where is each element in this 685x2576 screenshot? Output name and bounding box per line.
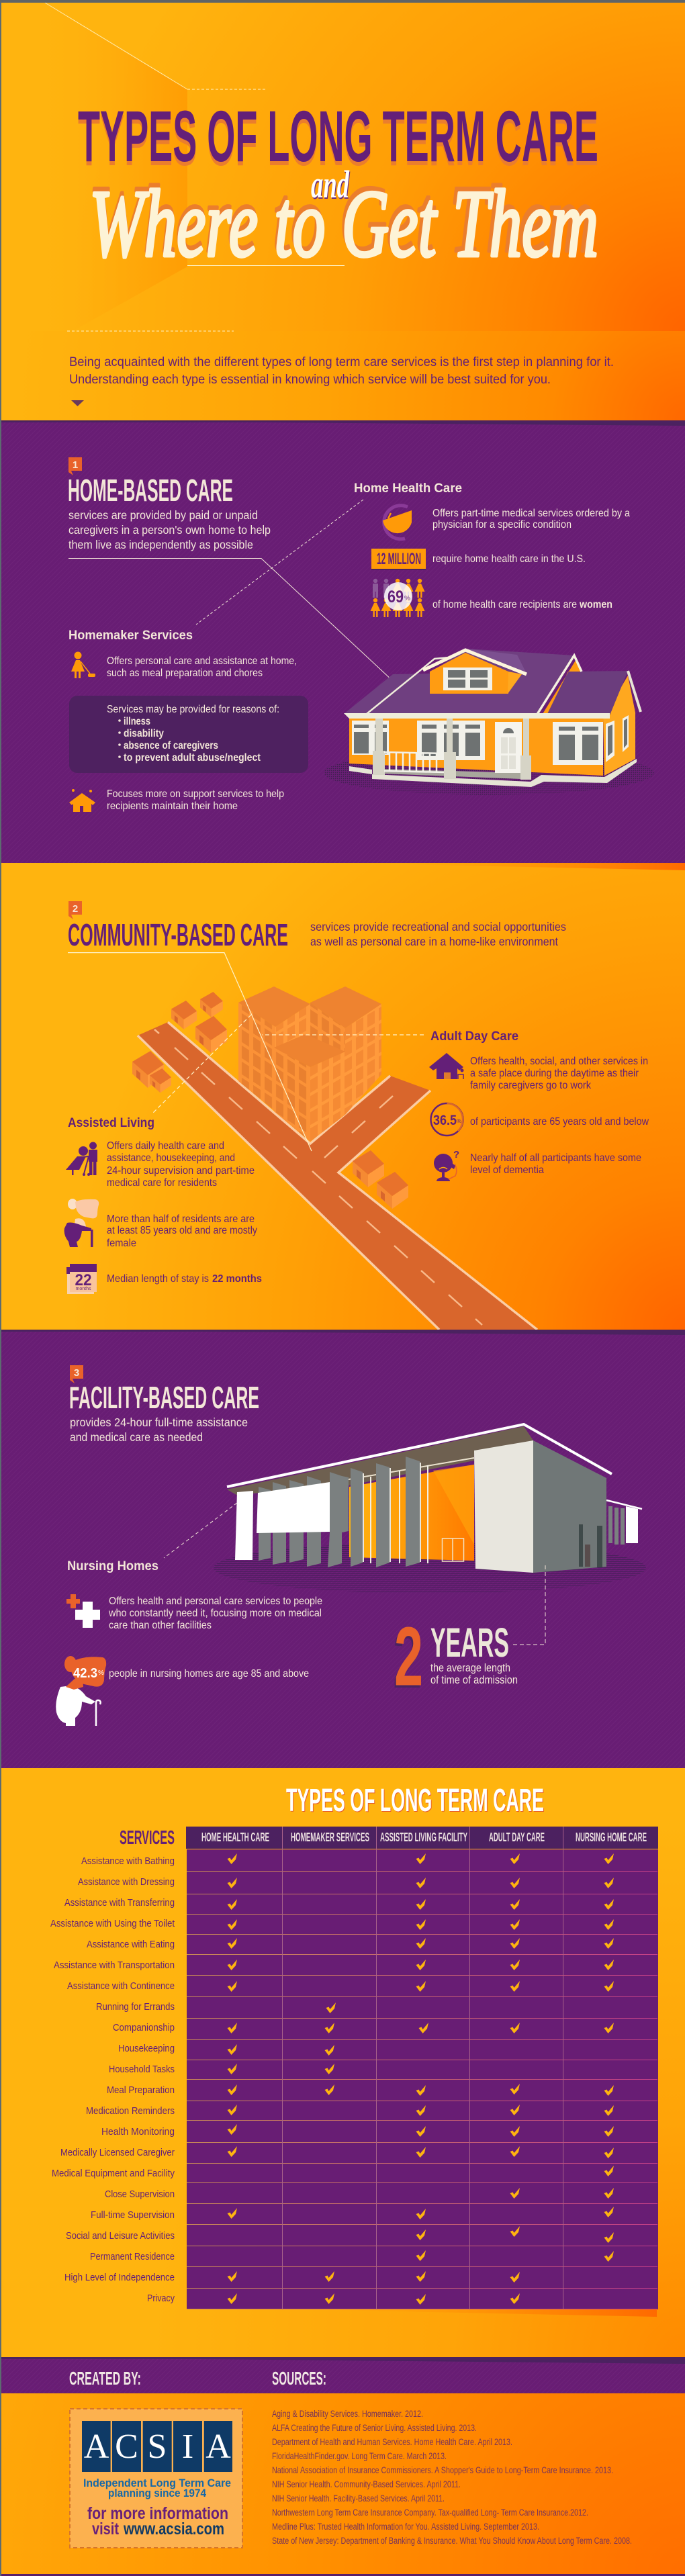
logo box: acsia: visit xyxy=(92,2520,120,2538)
services heading: SERVICES xyxy=(120,1827,175,1849)
stat: 2 years xyxy=(393,1610,518,1706)
text: assisted living: assistance, housekeeping, and xyxy=(107,1152,235,1164)
badge 1: 1 xyxy=(73,459,78,471)
sources list: Medline Plus: Trusted Health Information for You. Assisted Living. September 2013. xyxy=(272,2522,539,2532)
callout: reasons: absence of caregivers xyxy=(124,740,218,751)
text: support services: recipients maintain their home xyxy=(107,800,238,812)
heading: sources: SOURCES: xyxy=(272,2368,326,2389)
road illustration xyxy=(138,1022,537,1330)
service labels: Social and Leisure Activities xyxy=(66,2230,175,2242)
icon: elder woman xyxy=(64,1199,99,1247)
service labels: Medical Equipment and Facility xyxy=(52,2168,175,2179)
text: residents xyxy=(107,1213,257,1249)
text: participants: of participants are 65 years old and below xyxy=(470,1116,649,1128)
service labels: Assistance with Dressing xyxy=(78,1876,175,1888)
service labels: Assistance with Transportation xyxy=(54,1960,175,1971)
icon: calendar 22 months: months xyxy=(76,1287,91,1291)
stat: 2 years: the average length xyxy=(430,1662,510,1674)
subtitle: and: and xyxy=(312,164,351,208)
panel: home-based care xyxy=(1,420,685,864)
heading: facility-based care: FACILITY-BASED CARE xyxy=(69,1380,259,1415)
stat: 2 years: 2 xyxy=(394,1610,423,1703)
service labels: Assistance with Transferring xyxy=(64,1897,175,1908)
stat: 12 million: 12 MILLION xyxy=(377,550,421,568)
sources list: Aging & Disability Services. Homemaker. 2012. xyxy=(272,2409,423,2419)
description: as well as personal care in a home-like environment xyxy=(310,935,558,948)
badge 3: 3 xyxy=(74,1367,79,1379)
icon: medical crosses xyxy=(66,1594,100,1628)
panel: header xyxy=(1,3,685,420)
heading: adult day care: Adult Day Care xyxy=(430,1029,518,1044)
text: adult day care xyxy=(470,1056,648,1091)
stat: 2 years: 2 xyxy=(393,1613,422,1706)
text: personal care: Offers personal care and assistance at home, xyxy=(107,655,297,667)
house illustration xyxy=(324,649,654,795)
intro text xyxy=(69,355,614,387)
heading: home-based care: HOME-BASED CARE xyxy=(68,473,233,508)
icon: elder with percent xyxy=(56,1656,106,1726)
callout: reasons: to prevent adult abuse/neglect xyxy=(124,752,261,764)
callout: reasons: disability xyxy=(124,728,164,739)
heading: nursing homes: Nursing Homes xyxy=(67,1559,158,1573)
table header: HOME HEALTH CARE xyxy=(201,1831,269,1844)
stat: 36.5 percent: % xyxy=(457,1118,461,1124)
service labels: Companionship xyxy=(113,2022,175,2033)
text: median stay: Median length of stay is xyxy=(107,1273,209,1285)
callout: reasons xyxy=(69,696,308,773)
logo box: acsia: S xyxy=(148,2428,167,2466)
service labels: High Level of Independence xyxy=(64,2272,175,2283)
text: nursing homes: Offers health and personal care services to people xyxy=(109,1596,322,1607)
service labels: Medication Reminders xyxy=(86,2105,175,2117)
text: dementia: Nearly half of all participants have some xyxy=(470,1152,641,1164)
badge 2 xyxy=(68,901,82,919)
panel: footer band xyxy=(1,2357,685,2393)
sources list: NIH Senior Health. Community-Based Services. April 2011. xyxy=(272,2479,461,2489)
heading: homemaker services: Homemaker Services xyxy=(68,629,193,643)
service labels: Housekeeping xyxy=(118,2043,175,2054)
service labels: Household Tasks xyxy=(109,2064,175,2075)
description xyxy=(68,508,271,551)
stat: 36.5 percent: 36.5 xyxy=(433,1113,457,1128)
text: part-time medical services: physician for a specific condition xyxy=(432,519,572,531)
service labels: Close Supervision xyxy=(105,2189,175,2200)
icon: house with stars xyxy=(69,789,95,812)
service labels: Running for Errands xyxy=(96,2001,175,2013)
text: nursing homes: care than other facilities xyxy=(109,1620,212,1631)
description: provides 24-hour full-time assistance xyxy=(70,1416,248,1429)
building illustration xyxy=(238,986,381,1142)
text: women: women xyxy=(579,599,612,610)
small houses xyxy=(132,992,408,1209)
logo box: acsia: I xyxy=(182,2428,193,2466)
icon: elder with percent: 42.3 xyxy=(73,1666,97,1681)
logo box: acsia: C xyxy=(115,2428,138,2466)
text: adult day care: family caregivers go to work xyxy=(470,1080,592,1091)
service labels: Assistance with Eating xyxy=(87,1939,175,1950)
callout: reasons: Services may be provided for reasons of: xyxy=(107,704,279,715)
text: support services xyxy=(107,788,284,812)
icon: clock xyxy=(383,506,412,539)
sources list: FloridaHealthFinder.gov. Long Term Care. March 2013. xyxy=(272,2451,447,2461)
text: dementia xyxy=(470,1152,641,1176)
text: dementia: level of dementia xyxy=(470,1164,544,1176)
panel: facility-based care xyxy=(1,1330,685,1768)
callout: reasons: illness xyxy=(124,716,150,727)
badge 1 xyxy=(68,457,82,475)
heading: community-based care: COMMUNITY-BASED CARE xyxy=(68,917,288,952)
description: services provide recreational and social opportunities xyxy=(310,920,566,933)
logo box: acsia: A xyxy=(205,2428,231,2466)
icon: calendar 22 months xyxy=(66,1264,97,1294)
service labels xyxy=(50,1855,175,2304)
logo box: acsia: planning since 1974 xyxy=(108,2487,206,2499)
text: nursing homes xyxy=(108,1596,322,1631)
description: services are provided by paid or unpaid xyxy=(68,508,258,522)
text: assisted living xyxy=(107,1140,255,1189)
logo box: acsia: for more information xyxy=(87,2504,228,2523)
service labels: Assistance with Continence xyxy=(67,1980,175,1992)
text: assisted living: Offers daily health care and xyxy=(107,1140,224,1152)
service labels: Privacy xyxy=(147,2293,175,2304)
icon: woman with vacuum xyxy=(71,651,95,678)
icon: people 69 percent: % xyxy=(404,595,410,602)
icon: people 69 percent xyxy=(371,579,424,617)
stat: 2 years: YEARS xyxy=(430,1620,509,1665)
stat: 12 million xyxy=(371,549,426,570)
logo box: acsia: www.acsia.com xyxy=(123,2520,224,2538)
table header: ASSISTED LIVING FACILITY xyxy=(380,1831,467,1844)
service labels: Assistance with Using the Toilet xyxy=(50,1918,175,1929)
subtitle: and: and xyxy=(311,163,350,206)
description: caregivers in a person's own home to help xyxy=(68,523,271,537)
sources list: ALFA Creating the Future of Senior Living. Assisted Living. 2013. xyxy=(272,2423,477,2433)
stat: 2 years: of time of admission xyxy=(430,1674,518,1686)
text: adult day care: a safe place during the daytime as their xyxy=(470,1068,639,1079)
icon: calendar 22 months: 22 xyxy=(75,1271,91,1289)
text: age 85: people in nursing homes are age 85 and above xyxy=(109,1668,309,1680)
icon: purple house xyxy=(429,1053,463,1079)
table title xyxy=(286,1783,545,1819)
sources list: NIH Senior Health. Facility-Based Services. April 2011. xyxy=(272,2493,445,2503)
text: part-time medical services xyxy=(432,508,630,531)
sources list: Northwestern Long Term Care Insurance Company. Tax-qualified Long- Term Care Insurance.2012. xyxy=(272,2508,588,2518)
heading: home health care: Home Health Care xyxy=(354,481,462,496)
description xyxy=(310,920,566,948)
text: residents: female xyxy=(107,1238,136,1249)
text: residents: at least 85 years old and are mostly xyxy=(107,1225,257,1236)
text: adult day care: Offers health, social, and other services in xyxy=(470,1056,648,1067)
panel: credits xyxy=(1,2393,685,2574)
intro text: Being acquainted with the different types of long term care services is the first step in planning for it. xyxy=(69,355,614,369)
badge 2: 2 xyxy=(73,903,78,915)
description: them live as independently as possible xyxy=(68,538,253,551)
service labels: Permanent Residence xyxy=(90,2251,175,2262)
service labels: Assistance with Bathing xyxy=(81,1855,175,1867)
text: residents: More than half of residents are are xyxy=(107,1213,255,1225)
text: assisted living: medical care for residents xyxy=(107,1177,217,1189)
panel: community-based care xyxy=(1,863,685,1330)
text: nursing homes: who constantly need it, focusing more on medical xyxy=(108,1608,322,1619)
intro text: Understanding each type is essential in knowing which service will be best suited for you. xyxy=(69,373,551,387)
icon: elder with percent: % xyxy=(98,1669,104,1677)
icon: people 69 percent: 69 xyxy=(387,588,404,606)
logo box: acsia xyxy=(70,2409,242,2548)
icon: dementia head: ? xyxy=(453,1149,459,1160)
text: part-time medical services: Offers part-time medical services ordered by a xyxy=(432,508,630,519)
table header: HOMEMAKER SERVICES xyxy=(291,1831,369,1844)
table header xyxy=(186,1827,658,1849)
heading: created by: CREATED BY: xyxy=(69,2368,141,2389)
icon: caregiver and elder xyxy=(66,1142,97,1176)
description: and medical care as needed xyxy=(70,1430,203,1444)
table grid xyxy=(187,1827,658,2309)
text: personal care: such as meal preparation and chores xyxy=(107,668,263,679)
service labels: Health Monitoring xyxy=(101,2126,175,2137)
text: median stay: 22 months xyxy=(212,1273,262,1285)
logo box: acsia: Independent Long Term Care xyxy=(83,2477,231,2489)
text: require home health care: require home health care in the U.S. xyxy=(432,553,586,565)
checkmarks xyxy=(227,1853,614,2305)
table header: ADULT DAY CARE xyxy=(489,1831,545,1844)
stat: 36.5 percent xyxy=(431,1103,463,1136)
service labels: Meal Preparation xyxy=(107,2084,175,2096)
badge 3 xyxy=(70,1365,83,1383)
text: personal care xyxy=(107,655,297,679)
logo box: acsia: A xyxy=(84,2428,109,2466)
service labels: Full-time Supervision xyxy=(91,2209,175,2221)
icon: dementia head xyxy=(434,1149,459,1181)
building shadow xyxy=(214,1543,646,1594)
subtitle: and xyxy=(311,163,351,208)
heading: assisted living: Assisted Living xyxy=(68,1115,154,1130)
text: assisted living: 24-hour supervision and part-time xyxy=(107,1165,255,1177)
sources list: Department of Health and Human Services. Home Health Care. April 2013. xyxy=(272,2437,512,2447)
sources list xyxy=(272,2409,632,2546)
panel: comparison table xyxy=(1,1768,685,2357)
nursing home illustration xyxy=(227,1424,642,1573)
service labels: Medically Licensed Caregiver xyxy=(60,2147,175,2158)
description xyxy=(70,1416,248,1444)
arrow: down triangle xyxy=(71,400,84,406)
text: support services: Focuses more on support services to help xyxy=(107,788,284,800)
text: women: of home health care recipients are xyxy=(432,599,577,610)
